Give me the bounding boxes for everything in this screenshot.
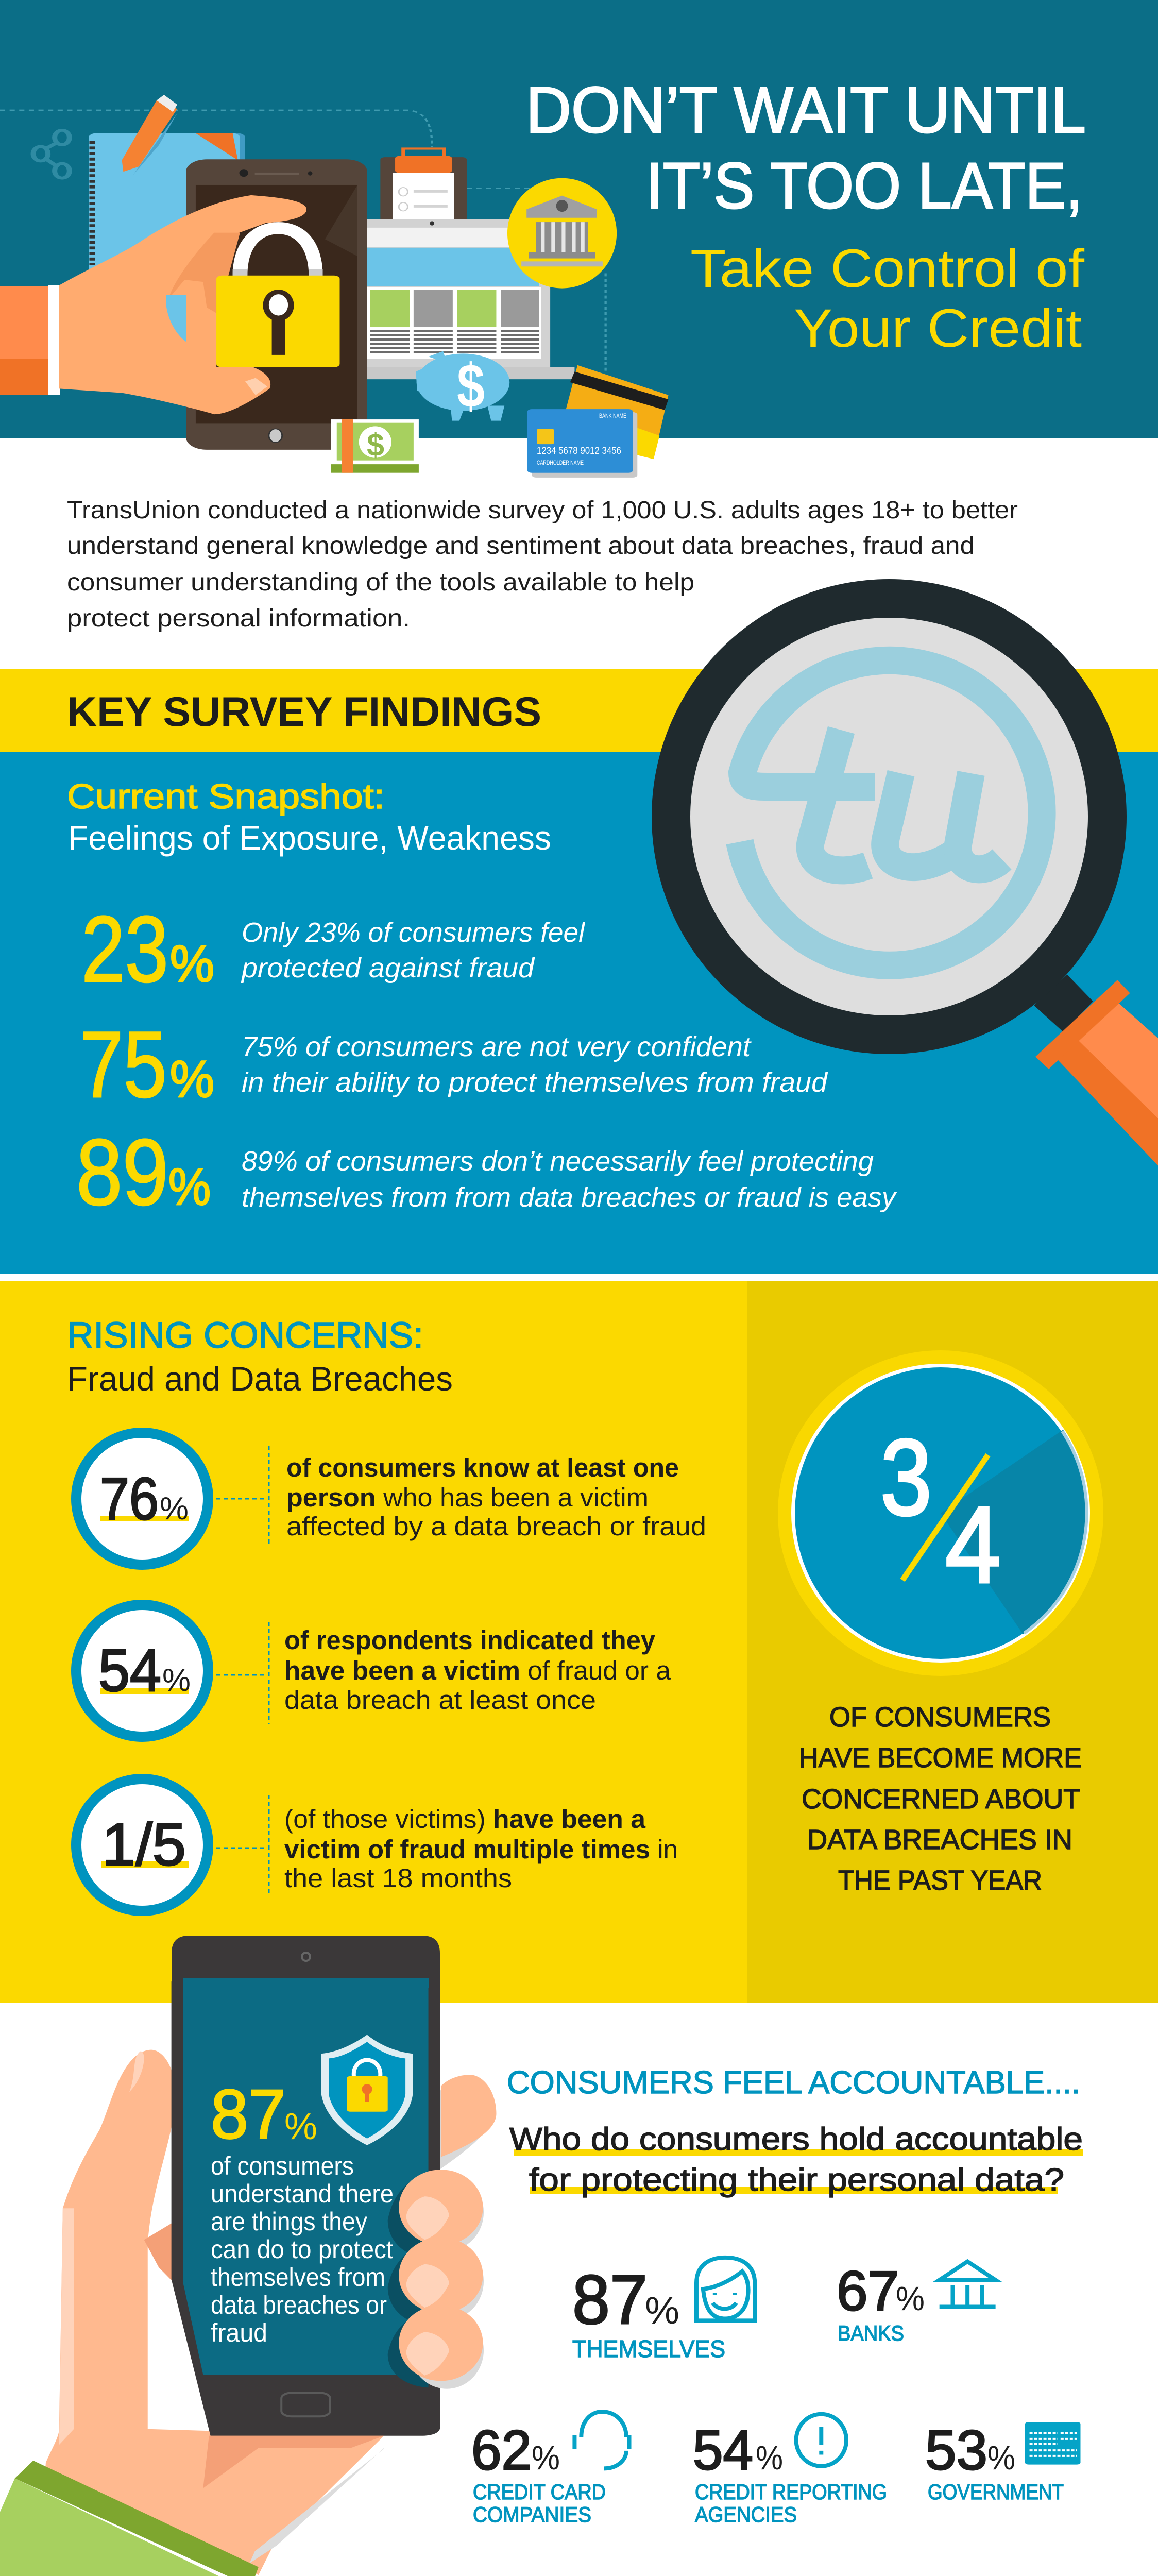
stat: 53% government: % (987, 2438, 1015, 2477)
illustration: hand, phone, padlock and finance items: $ (457, 351, 485, 420)
stat: 54% (76, 1605, 671, 1737)
panel: rising concerns (0, 1281, 1158, 2003)
text block: phone screen 87%: fraud (211, 2318, 267, 2347)
title: IT’S TOO LATE, (646, 149, 1083, 222)
stat: 54%: % (162, 1663, 191, 1698)
heading: rising concerns (67, 1315, 453, 1398)
panel: consumers feel accountable (0, 1936, 1158, 2576)
text block: 3/4 of consumers: CONCERNED ABOUT (802, 1784, 1080, 1815)
text block: intro (67, 497, 1018, 632)
stat: 23%: % (170, 935, 214, 993)
stat: 87% themselves (572, 2258, 755, 2362)
stat: 23%: Only 23% of consumers feel (242, 917, 586, 948)
stat: 1/5: (of those victims) have been a (284, 1804, 646, 1834)
stat: 76%: person who has been a victim (286, 1483, 649, 1512)
text block: phone screen 87%: data breaches or (211, 2291, 387, 2319)
stat: 62% credit card companies: % (532, 2438, 560, 2477)
stat: 1/5: victim of fraud multiple times in (284, 1835, 678, 1864)
text block: phone screen 87%: of consumers (211, 2151, 354, 2180)
stat: 67% banks: 67 (837, 2260, 899, 2323)
chart: three quarters circle (778, 1350, 1103, 1676)
illustration: hand, phone, padlock and finance items (0, 95, 668, 478)
illustration: hand, phone, padlock and finance items: 1234 5678 9012 3456 (537, 446, 621, 456)
stat: 1/5: 1/5 (102, 1811, 186, 1878)
stat: 75%: % (170, 1050, 214, 1108)
heading: rising concerns: Fraud and Data Breaches (67, 1360, 453, 1398)
text block: phone screen 87%: are things they (211, 2207, 367, 2236)
stat: 54% credit reporting agencies: 54 (693, 2419, 753, 2482)
heading: consumers feel accountable: CONSUMERS FEEL ACCOUNTABLE.... (507, 2065, 1080, 2100)
stat: 76% (76, 1433, 706, 1565)
title: DON’T WAIT UNTIL (526, 74, 1086, 146)
chart: three quarters circle: 4 (945, 1484, 1001, 1605)
stat: 54% credit reporting agencies: % (756, 2438, 783, 2477)
text block: 3/4 of consumers: THE PAST YEAR (838, 1865, 1042, 1896)
stat: 62% credit card companies (471, 2412, 629, 2527)
icon: magnifying glass with TU logo (652, 579, 1158, 1165)
stat: 87% themselves: % (645, 2289, 679, 2332)
text block: phone screen 87%: understand there (211, 2179, 394, 2208)
heading: consumers feel accountable: for protecting their personal data? (529, 2162, 1064, 2198)
stat: 89%: % (168, 1158, 211, 1216)
text block: 3/4 of consumers: DATA BREACHES IN (807, 1824, 1072, 1855)
stat: 89%: 89% of consumers don’t necessarily feel protecting (242, 1146, 874, 1177)
stat: 89%: 89 (76, 1120, 168, 1225)
stat: 62% credit card companies: 62 (471, 2419, 532, 2482)
stat: 75%: 75% of consumers are not very confident (242, 1031, 752, 1062)
text block: phone screen 87%: % (284, 2106, 317, 2147)
stat: 75%: in their ability to protect themselves from fraud (242, 1067, 828, 1098)
stat: 54% credit reporting agencies: CREDIT REPORTING (695, 2480, 887, 2504)
text block: intro: consumer understanding of the tools available to help (67, 569, 694, 596)
stat: 76%: % (160, 1491, 189, 1527)
stat: 87% themselves: THEMSELVES (572, 2335, 725, 2362)
title (526, 74, 1086, 359)
illustration: hand holding phone (0, 1936, 496, 2576)
title: Your Credit (794, 298, 1082, 359)
stat: 75% (80, 1012, 828, 1117)
text block: phone screen 87% (211, 2075, 394, 2347)
stat: 54%: have been a victim of fraud or a (284, 1656, 671, 1685)
title: Take Control of (690, 239, 1085, 299)
stat: 67% banks (837, 2260, 996, 2345)
heading: key survey findings: KEY SURVEY FINDINGS (67, 689, 541, 735)
text block: phone screen 87%: can do to protect (211, 2235, 393, 2264)
stat: 54%: 54 (98, 1637, 161, 1704)
text block: 3/4 of consumers (799, 1702, 1082, 1896)
panel: key survey findings (0, 669, 1158, 1274)
text block: phone screen 87%: themselves from (211, 2263, 385, 2292)
heading: consumers feel accountable (507, 2065, 1083, 2198)
stat: 89% (76, 1120, 897, 1225)
stat: 23%: 23 (81, 896, 168, 1002)
text block: 3/4 of consumers: OF CONSUMERS (829, 1702, 1051, 1733)
stat: 54% credit reporting agencies: AGENCIES (695, 2502, 797, 2527)
illustration: hand, phone, padlock and finance items: BANK NAME (599, 412, 626, 419)
stat: 54%: of respondents indicated they (284, 1625, 656, 1655)
stat: 1/5: the last 18 months (284, 1863, 512, 1893)
stat: 1/5 (76, 1779, 678, 1911)
text block: intro: TransUnion conducted a nationwide survey of 1,000 U.S. adults ages 18+ to better (67, 497, 1018, 524)
stat: 54%: data breach at least once (284, 1685, 596, 1715)
stat: 76%: affected by a data breach or fraud (286, 1512, 706, 1541)
text block: phone screen 87%: 87 (211, 2075, 286, 2153)
stat: 76%: of consumers know at least one (286, 1453, 679, 1482)
stat: 67% banks: % (896, 2279, 925, 2317)
stat: 23%: protected against fraud (241, 953, 535, 984)
stat: 54% credit reporting agencies (693, 2414, 887, 2527)
heading: current snapshot: Current Snapshot: (67, 777, 385, 816)
stat: 75%: 75 (80, 1012, 167, 1117)
text block: 3/4 of consumers: HAVE BECOME MORE (799, 1742, 1082, 1773)
heading: rising concerns: RISING CONCERNS: (67, 1315, 423, 1356)
illustration: hand, phone, padlock and finance items: CARDHOLDER NAME (537, 459, 584, 466)
stat: 67% banks: BANKS (838, 2321, 904, 2345)
stat: 89%: themselves from from data breaches or fraud is easy (242, 1182, 897, 1213)
stat: 53% government: GOVERNMENT (928, 2480, 1064, 2504)
stat: 53% government (925, 2419, 1081, 2504)
heading: consumers feel accountable: Who do consumers hold accountable (509, 2122, 1083, 2157)
text block: intro: protect personal information. (67, 605, 410, 632)
stat: 62% credit card companies: COMPANIES (473, 2502, 591, 2527)
illustration: hand, phone, padlock and finance items: $ (367, 428, 384, 463)
chart: three quarters circle: 3 (880, 1417, 932, 1538)
stat: 62% credit card companies: CREDIT CARD (473, 2480, 606, 2504)
stat: 23% (81, 896, 586, 1002)
heading: current snapshot: Feelings of Exposure, Weakness (68, 819, 551, 857)
panel: header (0, 0, 1158, 478)
stat: 87% themselves: 87 (572, 2261, 648, 2338)
text block: intro: understand general knowledge and sentiment about data breaches, fraud and (67, 532, 975, 560)
stat: 76%: 76 (100, 1465, 159, 1532)
stat: 53% government: 53 (925, 2419, 987, 2482)
icon: shield with lock (321, 2035, 413, 2145)
heading: current snapshot (67, 777, 551, 857)
